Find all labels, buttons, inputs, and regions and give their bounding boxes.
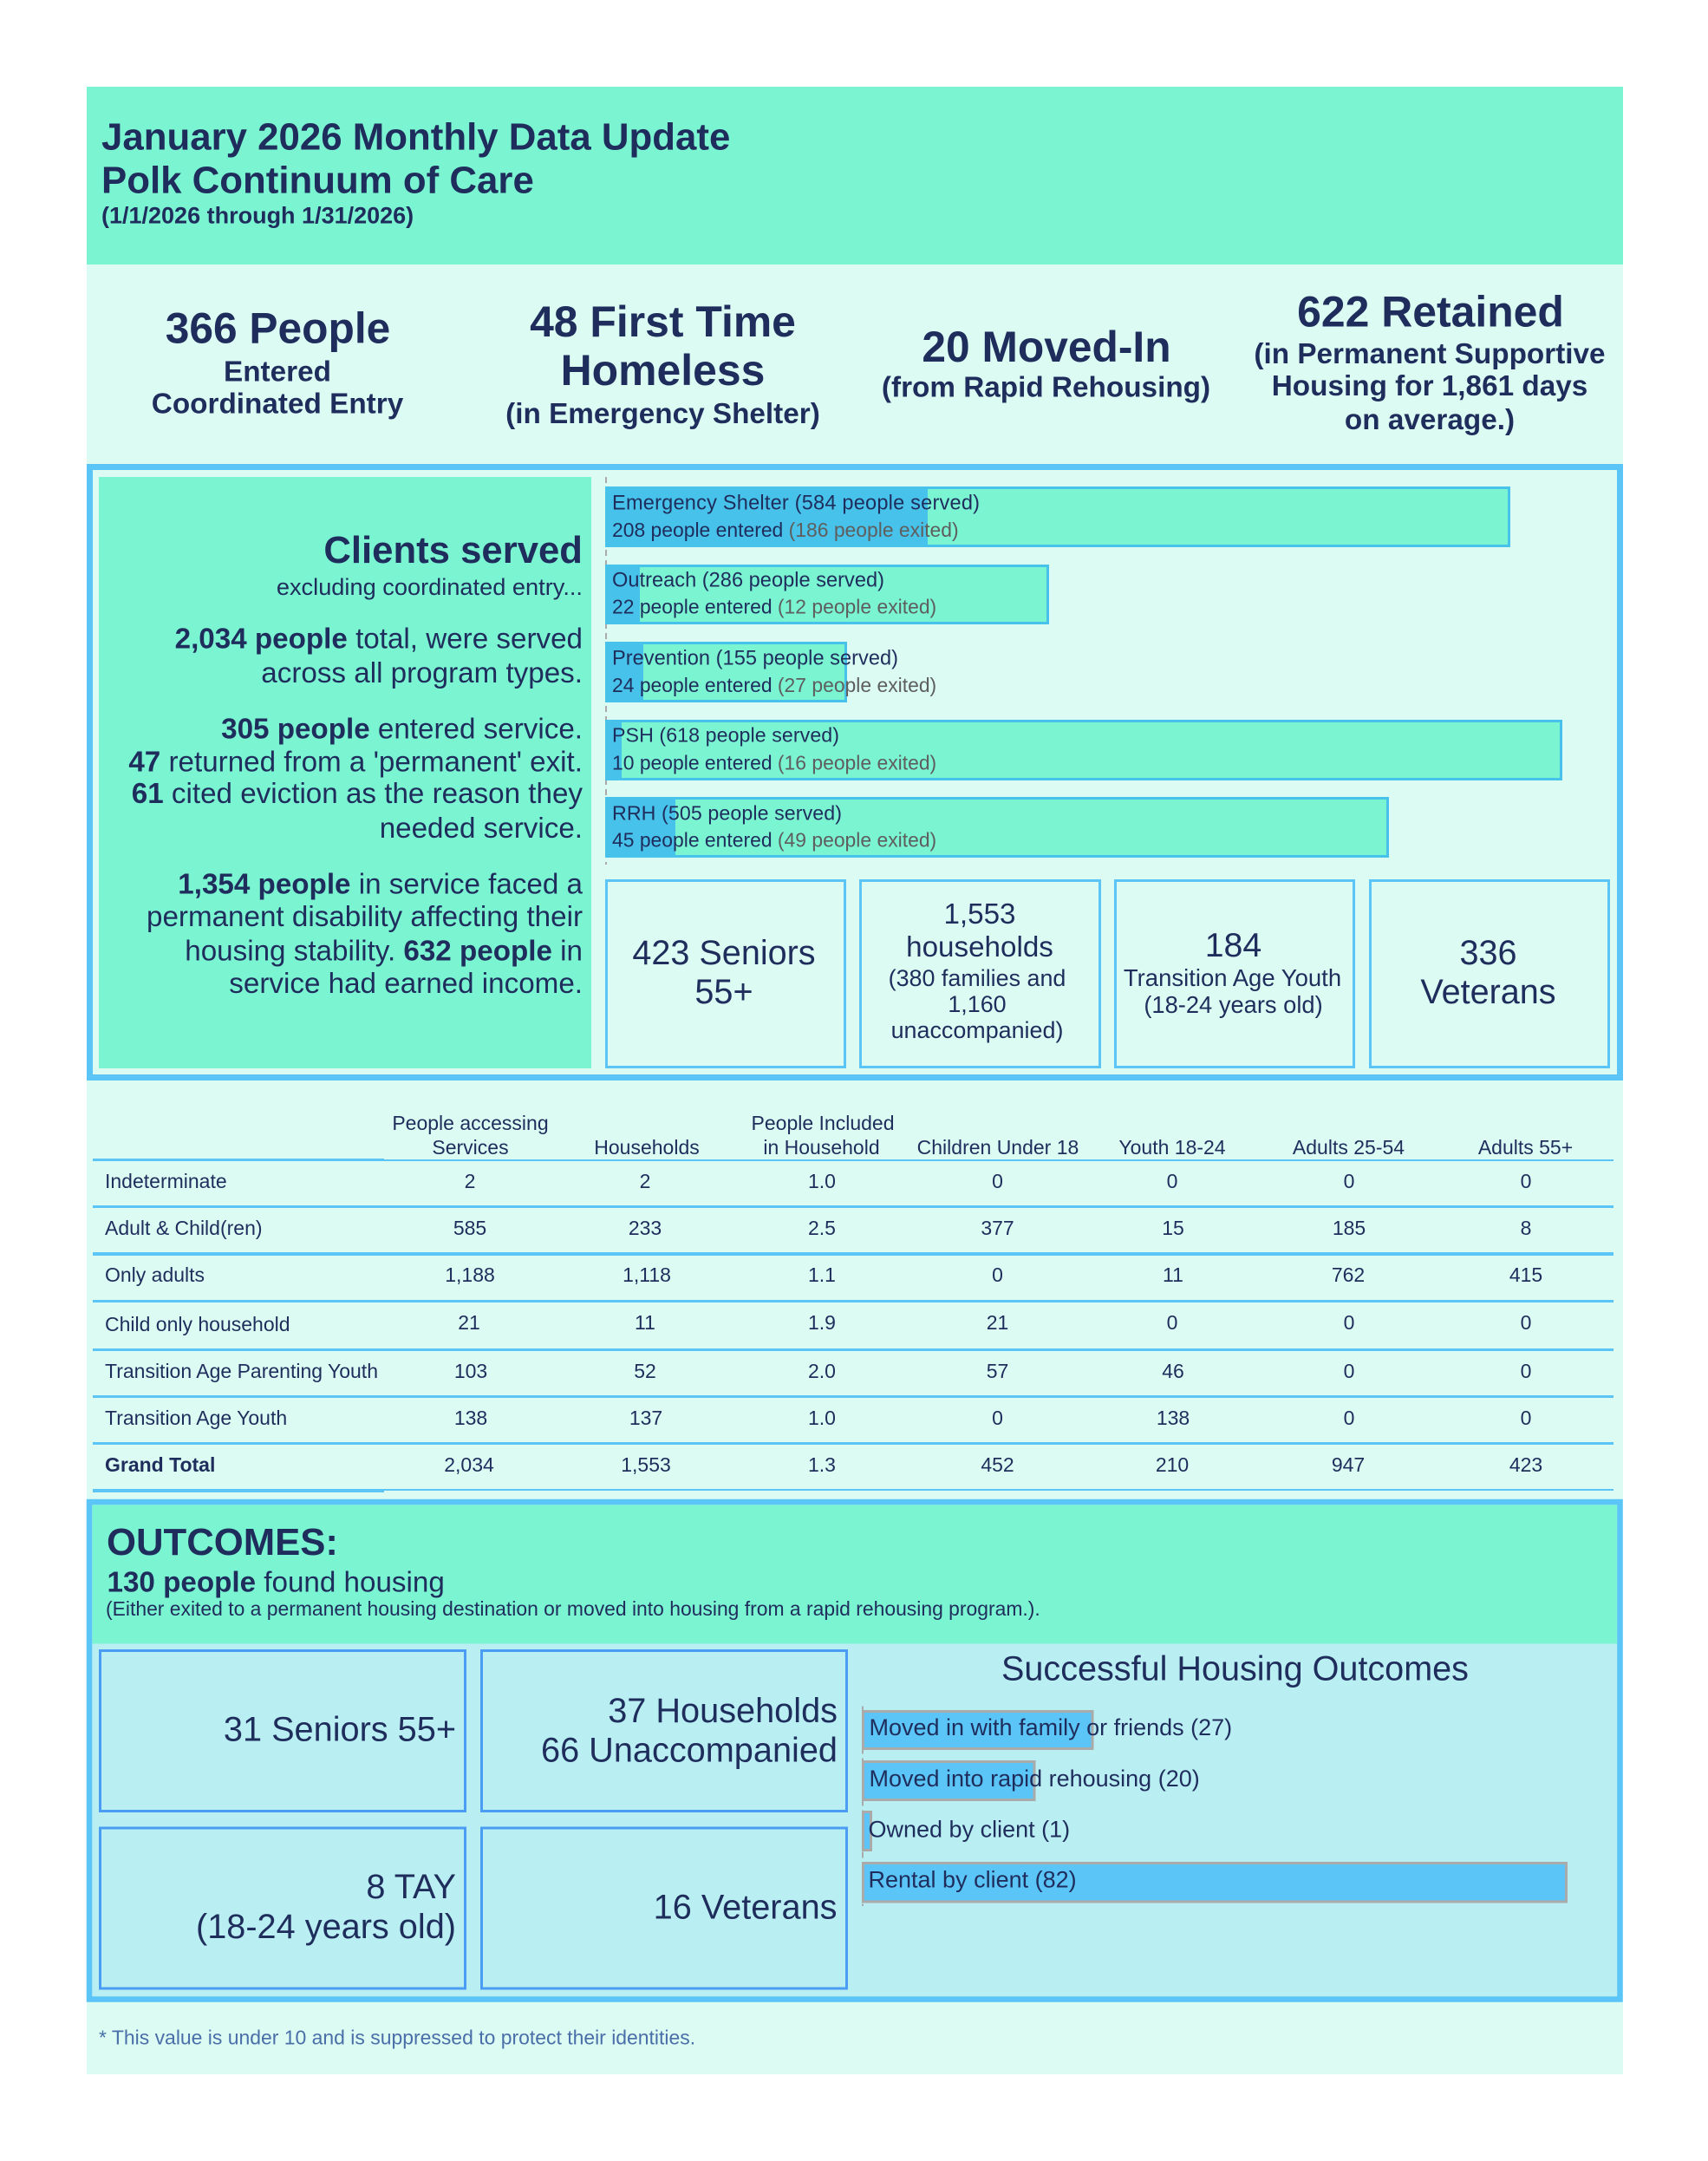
bar: moved in with family or friends: Moved in with family or friends (27)	[869, 1714, 1232, 1740]
outcomes heading	[92, 1505, 1617, 1644]
outcome box: seniors	[101, 1651, 465, 1811]
table header: Households	[594, 1136, 700, 1159]
table row: adult and children: 585	[453, 1217, 486, 1239]
table row: only adults: 0	[992, 1263, 1003, 1286]
bar: moved into rapid rehousing: Moved into rapid rehousing (20)	[869, 1766, 1200, 1792]
text block: clients served summary: 47 returned from a 'permanent' exit.	[128, 746, 583, 779]
table header: People accessing	[392, 1112, 549, 1134]
title banner	[87, 87, 1623, 264]
text block: clients served summary: needed service.	[380, 813, 583, 845]
table row: only adults: Only adults	[105, 1263, 205, 1286]
table row: child only household: 0	[1521, 1311, 1531, 1334]
bar: emergency shelter: 208 people entered (186 people exited)	[612, 519, 959, 541]
table row: transition age youth: 0	[992, 1407, 1003, 1429]
stat box: households: unaccompanied)	[891, 1017, 1063, 1043]
bar: rental by client: Rental by client (82)	[869, 1866, 1077, 1892]
stat box: households: 1,160	[948, 991, 1007, 1017]
table row: child only household: 0	[1167, 1311, 1177, 1334]
table row: grand total: Grand Total	[105, 1453, 215, 1476]
table header	[392, 1112, 1573, 1159]
text block: clients served summary: 305 people entered service.	[221, 713, 583, 746]
bar: outreach	[605, 565, 1049, 624]
KPI: 48 first time homeless: (in Emergency Shelter)	[505, 398, 820, 430]
KPI: 48 first time homeless: Homeless	[561, 346, 765, 395]
bar: RRH: RRH (505 people served)	[612, 801, 842, 824]
bar chart: program types	[605, 477, 1562, 865]
bar: RRH	[605, 797, 1389, 858]
KPI: 622 retained: (in Permanent Supportive	[1254, 338, 1606, 370]
title banner: Polk Continuum of Care	[101, 160, 534, 201]
outcomes heading: 130 people found housing	[108, 1566, 445, 1599]
text block: clients served summary: 2,034 people total, were served	[175, 623, 583, 656]
table row: child only household: 1.9	[808, 1311, 836, 1334]
table row: grand total	[105, 1453, 1542, 1476]
table row: grand total: 1,553	[621, 1453, 671, 1476]
table header: Services	[432, 1136, 509, 1159]
table row: child only household: 0	[1344, 1311, 1354, 1334]
bar: emergency shelter	[605, 486, 1510, 547]
stat box: households: (380 families and	[889, 965, 1066, 991]
table header: Youth 18-24	[1118, 1136, 1226, 1159]
stat box: seniors	[607, 881, 844, 1067]
outcome box: veterans	[482, 1828, 846, 1988]
text block: clients served summary: Clients served	[323, 529, 583, 571]
text block: clients served summary: permanent disability affecting their	[147, 901, 583, 933]
table row: adult and children: 2.5	[808, 1217, 836, 1239]
table row: transition age youth: 1.0	[808, 1407, 836, 1429]
table row: transition age parenting youth: 46	[1162, 1360, 1184, 1382]
table row: grand total: 423	[1509, 1453, 1542, 1476]
table row: child only household: 21	[987, 1311, 1008, 1334]
bar: owned by client: Owned by client (1)	[869, 1816, 1070, 1842]
table row: grand total: 452	[981, 1453, 1014, 1476]
outcome box: households: 66 Unaccompanied	[541, 1731, 838, 1769]
table row: transition age parenting youth: Transition Age Parenting Youth	[105, 1360, 378, 1382]
table row: adult and children: 8	[1521, 1217, 1531, 1239]
table row: child only household	[105, 1311, 1531, 1335]
outcome box: households	[482, 1651, 846, 1811]
KPI: 622 retained: on average.)	[1345, 404, 1515, 436]
text block: clients served summary: excluding coordinated entry...	[277, 573, 583, 600]
outcome box: TAY: (18-24 years old)	[196, 1908, 456, 1946]
table row: transition age youth: 138	[1157, 1407, 1190, 1429]
table row: only adults: 415	[1509, 1263, 1542, 1286]
table row: indeterminate: 0	[1344, 1170, 1354, 1192]
KPI: 366 people entered: Coordinated Entry	[152, 388, 404, 420]
table header: Adults 55+	[1478, 1136, 1573, 1159]
bar: RRH: 45 people entered (49 people exited)	[612, 829, 936, 852]
text block: clients served summary: 1,354 people in service faced a	[178, 869, 583, 900]
text block: clients served summary: 61 cited eviction as the reason they	[132, 778, 583, 810]
table row: transition age youth: 137	[629, 1407, 662, 1429]
bar: moved in with family or friends	[864, 1712, 1232, 1748]
table row: indeterminate: 2	[465, 1170, 475, 1192]
table row: transition age parenting youth: 57	[987, 1360, 1008, 1382]
panel: outcomes	[89, 1502, 1620, 2000]
outcome box: TAY	[101, 1828, 465, 1988]
table row: adult and children	[105, 1217, 1531, 1239]
bar chart: housing outcomes	[863, 1707, 1566, 1906]
title banner: (1/1/2026 through 1/31/2026)	[101, 203, 414, 229]
stat box: seniors: 55+	[694, 973, 753, 1011]
outcome box: households: 37 Households	[608, 1692, 838, 1730]
table row: transition age parenting youth: 2.0	[808, 1360, 836, 1382]
stat box: seniors: 423 Seniors	[632, 934, 816, 972]
table row: indeterminate: 0	[1521, 1170, 1531, 1192]
bar: prevention	[605, 642, 936, 702]
table row: only adults: 1.1	[808, 1263, 836, 1286]
table row: grand total: 2,034	[444, 1453, 494, 1476]
KPI: 622 retained	[1254, 288, 1606, 436]
bar: PSH: 10 people entered (16 people exited)	[612, 751, 936, 774]
table row: child only household: 11	[635, 1311, 655, 1334]
table row: grand total: 1.3	[808, 1453, 836, 1476]
table row: child only household: 21	[458, 1311, 480, 1334]
bar: rental by client	[864, 1863, 1566, 1902]
table row: adult and children: Adult & Child(ren)	[105, 1217, 263, 1239]
stat box: households	[860, 881, 1099, 1067]
outcome box: veterans: 16 Veterans	[654, 1889, 838, 1927]
table row: transition age youth: 0	[1344, 1407, 1354, 1429]
table row: adult and children: 15	[1162, 1217, 1184, 1239]
stat box: transition age youth: 184	[1205, 926, 1261, 964]
outcomes heading: (Either exited to a permanent housing destination or moved into housing from a rapid rehousing program.).	[106, 1597, 1040, 1620]
table row: grand total: 210	[1156, 1453, 1189, 1476]
text block: clients served summary: service had earned income.	[229, 968, 583, 1000]
table row: indeterminate: 0	[992, 1170, 1003, 1192]
heading: successful housing outcomes: Successful Housing Outcomes	[1001, 1649, 1469, 1688]
table row: grand total: 947	[1332, 1453, 1365, 1476]
table row: transition age parenting youth	[105, 1360, 1531, 1382]
KPI: 20 moved-in: (from Rapid Rehousing)	[882, 371, 1210, 404]
bar: PSH: PSH (618 people served)	[612, 723, 839, 746]
KPI: 48 first time homeless	[505, 297, 820, 430]
table row: adult and children: 233	[629, 1217, 662, 1239]
table header: People Included	[752, 1112, 894, 1134]
stat box: transition age youth: (18-24 years old)	[1144, 991, 1323, 1018]
bar: outreach: 22 people entered (12 people exited)	[612, 595, 936, 617]
text block: clients served summary	[99, 477, 591, 1068]
table row: indeterminate: 1.0	[808, 1170, 836, 1192]
table row: only adults	[105, 1263, 1542, 1286]
text block: clients served summary: across all program types.	[261, 657, 583, 689]
outcome box: TAY: 8 TAY	[366, 1868, 456, 1906]
KPI: 366 people entered	[152, 304, 404, 420]
table row: only adults: 1,118	[623, 1263, 671, 1286]
stat box: veterans: 336	[1459, 934, 1517, 972]
KPI: 366 people entered: Entered	[224, 356, 331, 388]
table row: transition age youth	[105, 1407, 1531, 1429]
table header: Adults 25-54	[1293, 1136, 1405, 1159]
table row: transition age parenting youth: 52	[634, 1360, 656, 1382]
bar: outreach: Outreach (286 people served)	[612, 569, 884, 591]
KPI: 20 moved-in: 20 Moved-In	[922, 323, 1171, 371]
table row: only adults: 762	[1332, 1263, 1365, 1286]
bar: moved into rapid rehousing	[864, 1762, 1200, 1800]
table row: indeterminate: 0	[1167, 1170, 1177, 1192]
table row: only adults: 1,188	[445, 1263, 495, 1286]
stat box: veterans: Veterans	[1420, 973, 1556, 1011]
KPI: 366 people entered: 366 People	[166, 304, 390, 352]
table row: only adults: 11	[1163, 1263, 1183, 1286]
table row: transition age youth: Transition Age Youth	[105, 1407, 287, 1429]
bar: PSH	[605, 720, 1562, 780]
text block: clients served summary: housing stability. 632 people in	[185, 935, 583, 968]
table row: transition age parenting youth: 0	[1521, 1360, 1531, 1382]
table row: transition age parenting youth: 0	[1344, 1360, 1354, 1382]
stat box: veterans	[1370, 881, 1609, 1067]
outcomes heading: OUTCOMES:	[107, 1521, 338, 1564]
stat box: households: 1,553	[943, 898, 1016, 930]
table row: adult and children: 185	[1333, 1217, 1366, 1239]
stat box: households: households	[906, 931, 1053, 963]
panel: clients served	[90, 467, 1620, 1077]
KPI: 20 moved-in	[882, 323, 1210, 404]
footnote: * This value is under 10 and is suppressed to protect their identities.	[99, 2026, 695, 2048]
stat box: transition age youth	[1115, 881, 1354, 1067]
bar: owned by client	[864, 1812, 1070, 1851]
table row: transition age parenting youth: 103	[454, 1360, 487, 1382]
bar: prevention: 24 people entered (27 people exited)	[612, 674, 936, 696]
table row: indeterminate: Indeterminate	[105, 1170, 227, 1192]
table header: in Household	[763, 1136, 880, 1159]
KPI: 48 first time homeless: 48 First Time	[530, 297, 796, 346]
table row: transition age youth: 0	[1521, 1407, 1531, 1429]
table row: transition age youth: 138	[454, 1407, 487, 1429]
stat box: transition age youth: Transition Age Youth	[1124, 964, 1341, 991]
bar: prevention: Prevention (155 people served)	[612, 647, 898, 669]
title banner: January 2026 Monthly Data Update	[101, 116, 730, 158]
table row: indeterminate	[105, 1170, 1531, 1192]
KPI: 622 retained: 622 Retained	[1297, 288, 1564, 336]
table header: Children Under 18	[917, 1136, 1079, 1159]
table row: adult and children: 377	[981, 1217, 1014, 1239]
KPI: 622 retained: Housing for 1,861 days	[1272, 370, 1587, 402]
table row: indeterminate: 2	[640, 1170, 650, 1192]
table: household demographics	[93, 1112, 1613, 1492]
bar: emergency shelter: Emergency Shelter (584 people served)	[612, 493, 980, 515]
table row: child only household: Child only household	[105, 1313, 290, 1335]
outcome box: seniors: 31 Seniors 55+	[224, 1710, 456, 1748]
